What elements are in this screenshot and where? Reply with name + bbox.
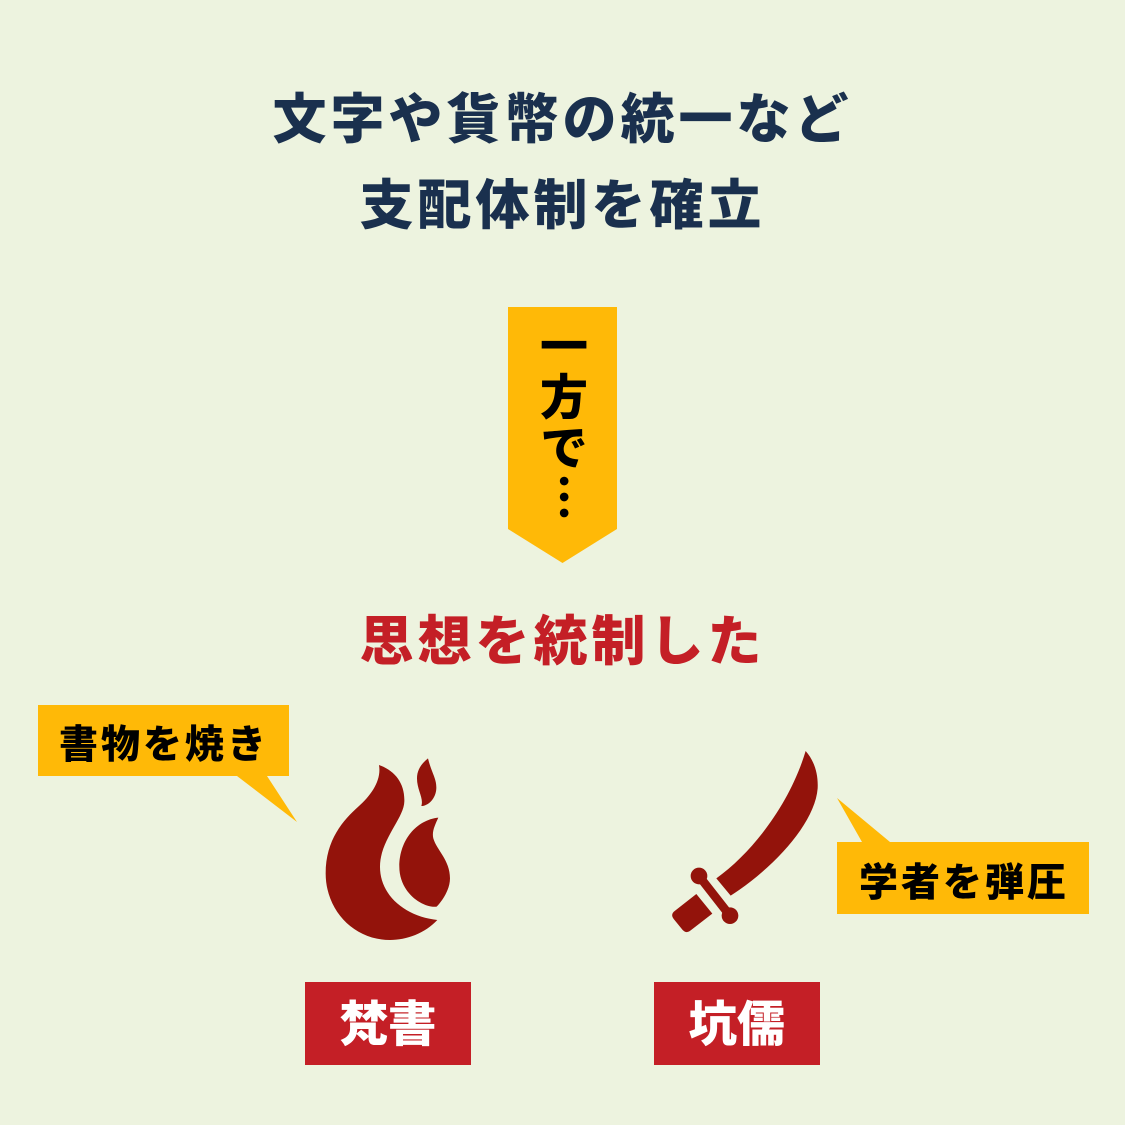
title: 文字や貨幣の統一など <box>272 90 852 150</box>
label: burning of books <box>305 982 471 1065</box>
title: 支配体制を確立 <box>360 176 766 236</box>
title <box>272 90 852 236</box>
subheading: 思想を統制した <box>360 612 766 672</box>
callout: burning books <box>38 705 297 822</box>
callout: scholars suppressed: 学者を弾圧 <box>859 862 1069 905</box>
arrow banner <box>508 307 617 563</box>
callout: burning books: 書物を焼き <box>59 724 269 767</box>
callout: scholars suppressed <box>837 798 1089 914</box>
label: burning of books: 梵書 <box>339 998 436 1052</box>
label: burying of scholars <box>654 982 820 1065</box>
label: burying of scholars: 坑儒 <box>688 998 786 1052</box>
arrow banner text: 一方で … <box>529 321 602 524</box>
